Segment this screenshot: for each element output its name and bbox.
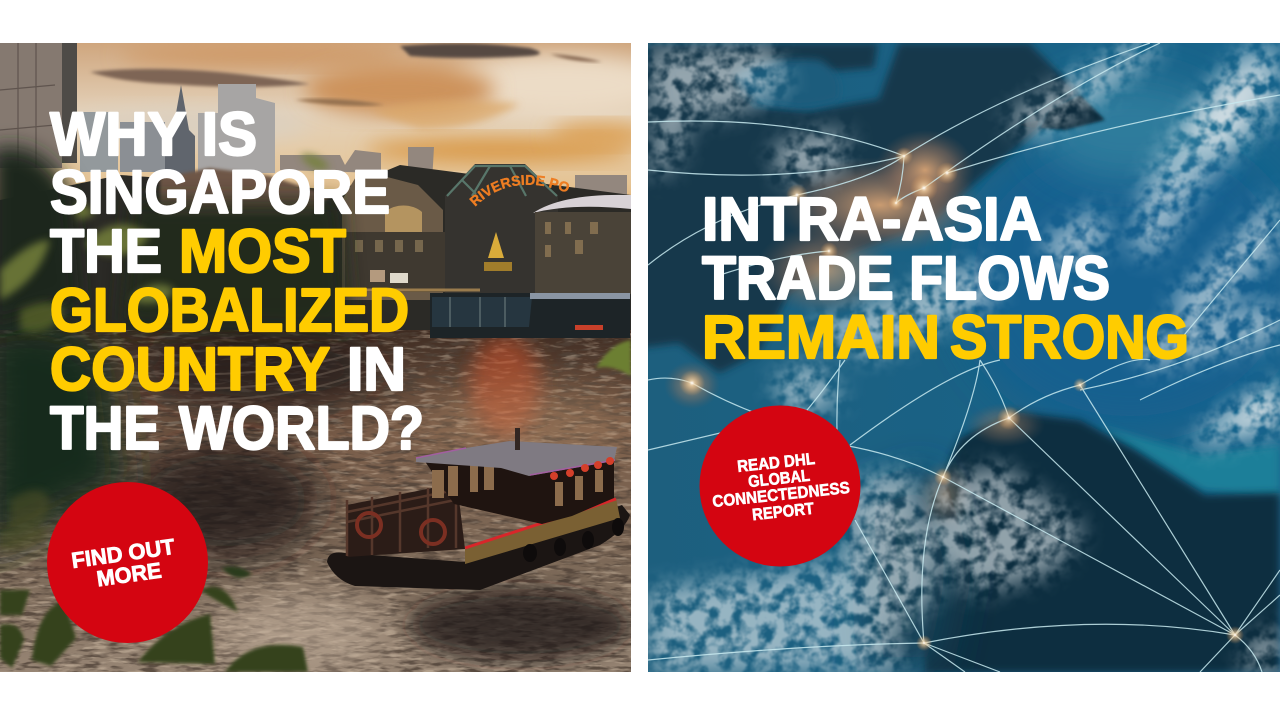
heading: Singapore question: THE bbox=[50, 394, 160, 462]
bright cloud cores bbox=[1190, 70, 1280, 432]
heading: intra-Asia trade flows: INTRA-ASIA bbox=[702, 185, 1042, 253]
heading: intra-Asia trade flows: REMAIN bbox=[702, 303, 940, 371]
foreground foliage bbox=[0, 147, 631, 672]
landmasses bbox=[599, 43, 1280, 673]
heading: Singapore question: WHY IS bbox=[50, 100, 257, 168]
heading: Singapore question: WORLD? bbox=[179, 394, 424, 462]
panel: Earth at night photo bbox=[599, 43, 1280, 673]
callout: read report button bbox=[700, 406, 860, 566]
heading: Singapore question: GLOBALIZED bbox=[50, 276, 409, 344]
callout: read report button: REPORT bbox=[751, 500, 815, 524]
river water bbox=[0, 293, 640, 672]
trade route network bbox=[648, 43, 1280, 672]
route hub glows bbox=[679, 147, 1244, 651]
callout: read report button: CONNECTEDNESS bbox=[712, 479, 851, 511]
callout: find out more button: MORE bbox=[95, 558, 163, 591]
heading: intra-Asia trade flows: STRONG bbox=[950, 303, 1189, 371]
heading: Singapore question bbox=[50, 100, 424, 462]
heading: Singapore question: IN bbox=[347, 335, 406, 403]
ferry boat bbox=[327, 428, 630, 590]
heading: Singapore question: THE bbox=[50, 217, 162, 285]
heading: Singapore question: COUNTRY bbox=[50, 335, 330, 403]
skyline buildings bbox=[0, 43, 627, 195]
riverside point sign bbox=[469, 174, 570, 206]
callout: read report button: GLOBAL bbox=[747, 467, 811, 491]
callout: read report button: READ DHL bbox=[736, 450, 816, 476]
riverside shophouses bbox=[0, 164, 631, 335]
ocean tones bbox=[960, 80, 1280, 500]
heading: intra-Asia trade flows: TRADE FLOWS bbox=[702, 244, 1110, 312]
sky with sunset clouds bbox=[0, 43, 631, 200]
ocean base bbox=[648, 43, 1280, 672]
city lights bbox=[664, 130, 1045, 530]
cloud layers bbox=[648, 43, 1280, 672]
callout: find out more button: FIND OUT bbox=[70, 534, 177, 573]
heading: Singapore question: MOST bbox=[179, 217, 346, 285]
panel: Singapore photo bbox=[0, 43, 631, 672]
heading: intra-Asia trade flows bbox=[702, 185, 1189, 371]
heading: Singapore question: SINGAPORE bbox=[50, 158, 390, 226]
callout: find out more button bbox=[47, 482, 208, 643]
